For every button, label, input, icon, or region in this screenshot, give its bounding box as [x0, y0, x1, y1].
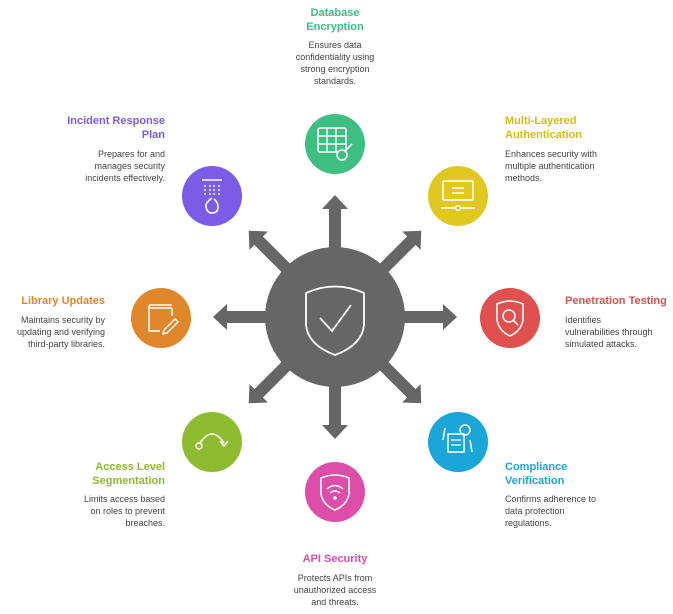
text: incident response plan: incidents effectively.	[85, 173, 165, 183]
text: access level segmentation: breaches.	[125, 518, 165, 528]
text: compliance verification: Confirms adherence to	[505, 494, 596, 504]
text: penetration testing: Penetration Testing	[565, 295, 667, 307]
text: incident response plan	[67, 115, 165, 183]
text: database encryption: strong encryption	[300, 64, 370, 74]
icon: compliance verification	[428, 412, 488, 472]
text: database encryption: Ensures data	[308, 40, 362, 50]
text: library updates: updating and verifying	[17, 327, 105, 337]
text: multi-layered authentication	[505, 115, 597, 183]
text: database encryption	[296, 7, 374, 86]
text: api security: unauthorized access	[294, 585, 377, 595]
central shield hub	[265, 247, 405, 387]
text: multi-layered authentication: Multi-Layered	[505, 115, 577, 127]
text: incident response plan: manages security	[94, 161, 165, 171]
text: compliance verification: Compliance	[505, 461, 567, 473]
text: database encryption: standards.	[314, 76, 356, 86]
text: compliance verification: regulations.	[505, 518, 552, 528]
text: access level segmentation	[84, 461, 165, 528]
text: database encryption: Encryption	[306, 21, 364, 33]
text: incident response plan: Incident Response	[67, 115, 165, 127]
text: access level segmentation: on roles to prevent	[90, 506, 165, 516]
icon: access level segmentation	[182, 412, 242, 472]
icon: multi-layered authentication	[428, 166, 488, 226]
text: penetration testing: vulnerabilities through	[565, 327, 653, 337]
text: multi-layered authentication: methods.	[505, 173, 542, 183]
text: multi-layered authentication: Authentication	[505, 129, 582, 141]
text: penetration testing: Identifies	[565, 315, 602, 325]
text: multi-layered authentication: Enhances security with	[505, 149, 597, 159]
text: compliance verification: Verification	[505, 475, 565, 487]
text: access level segmentation: Access Level	[95, 461, 165, 473]
text: access level segmentation: Limits access based	[84, 494, 165, 504]
arrows	[213, 195, 457, 439]
text: api security: and threats.	[311, 597, 359, 607]
text: api security: Protects APIs from	[298, 573, 372, 583]
icon: library updates	[131, 288, 191, 348]
text: api security: API Security	[303, 553, 368, 565]
icon: api security	[305, 462, 365, 522]
icon: incident response	[182, 166, 242, 226]
text: database encryption: Database	[311, 7, 359, 19]
text: compliance verification	[505, 461, 596, 528]
text: multi-layered authentication: multiple authentication	[505, 161, 595, 171]
text: library updates: Maintains security by	[21, 315, 105, 325]
icon: penetration testing	[480, 288, 540, 348]
text: incident response plan: Prepares for and	[98, 149, 165, 159]
icon: database encryption	[305, 114, 365, 174]
text: library updates: third-party libraries.	[28, 339, 105, 349]
text: library updates	[17, 295, 105, 349]
text: incident response plan: Plan	[142, 129, 165, 141]
text: compliance verification: data protection	[505, 506, 565, 516]
text: penetration testing	[565, 295, 667, 349]
text: library updates: Library Updates	[21, 295, 105, 307]
text: database encryption: confidentiality using	[296, 52, 374, 62]
text: penetration testing: simulated attacks.	[565, 339, 637, 349]
text: api security	[294, 553, 377, 607]
text: access level segmentation: Segmentation	[92, 475, 165, 487]
